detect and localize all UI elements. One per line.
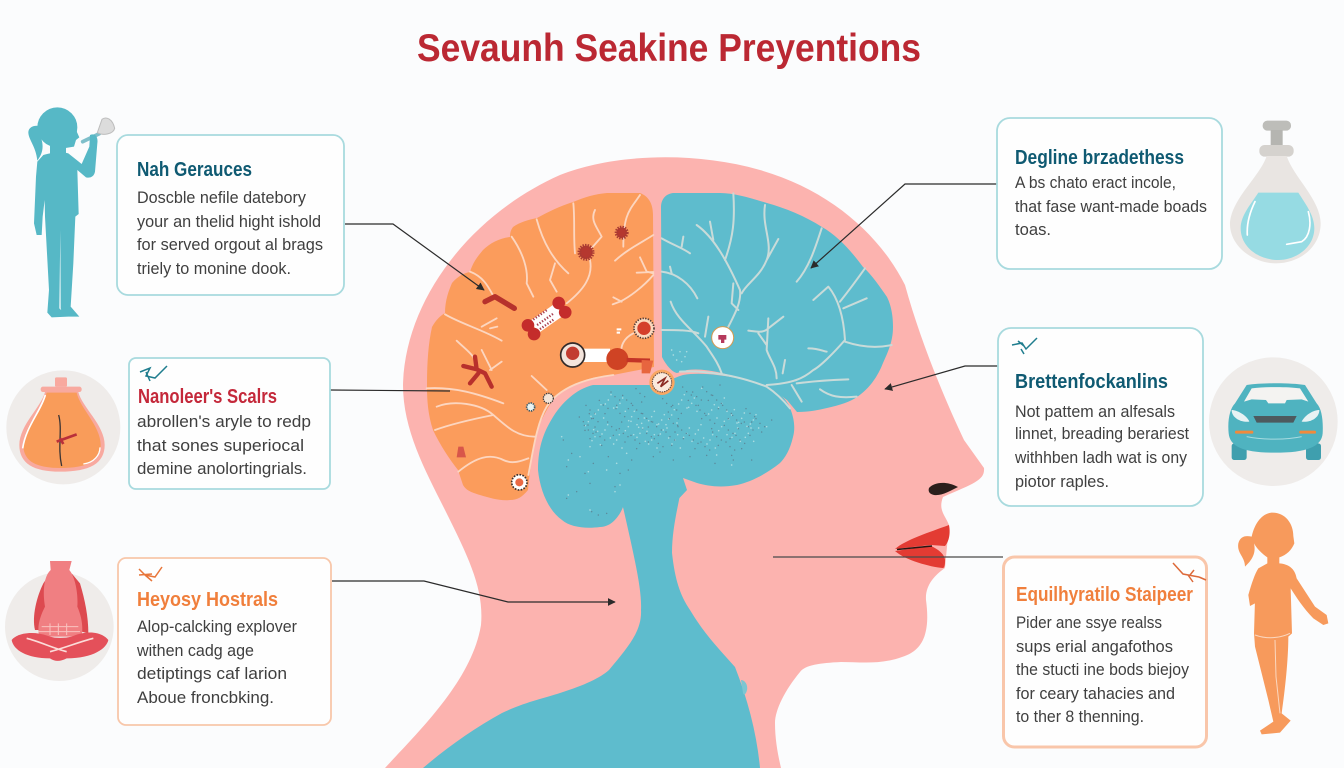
nose	[929, 483, 958, 495]
flask cap	[1259, 121, 1294, 157]
microbe, ringed	[634, 318, 654, 338]
icon: jar in circle	[6, 370, 120, 484]
cell, bottom left	[512, 475, 527, 490]
head profile illustration	[385, 157, 984, 768]
squiggle icon	[140, 366, 167, 381]
panel: Heyosy Hostrals	[118, 558, 331, 725]
car	[1228, 383, 1323, 460]
capsule, diagonal	[519, 294, 574, 343]
body text: sups erial angafothos	[1016, 638, 1173, 656]
title: Sevaunh Seakine Preyentions	[417, 27, 921, 70]
squiggle icon	[1173, 563, 1206, 582]
squiggle icon	[139, 567, 162, 581]
body text: Alop-calcking explover	[137, 618, 297, 636]
cerebellum	[538, 374, 794, 540]
brain left lobe, orange	[427, 193, 654, 500]
figure	[12, 561, 108, 661]
panel: Nanoleer's Scalrs	[129, 358, 330, 489]
small cells	[527, 329, 621, 411]
panel: Degline brzadethess	[997, 118, 1222, 269]
body text: the stucti ine bods biejoy	[1016, 661, 1190, 679]
cerebellum speckles	[562, 350, 772, 515]
body text: linnet, breading berariest	[1015, 425, 1189, 443]
connector: Heyosy Hostrals	[332, 581, 615, 602]
water	[1241, 193, 1314, 260]
connector: Equilhyratilo Staipeer	[773, 556, 1003, 558]
body text: withen cadg age	[136, 642, 254, 660]
flask body	[1230, 156, 1321, 263]
figure	[28, 107, 98, 317]
neck and throat	[423, 478, 760, 768]
body text: abrollen's aryle to redp	[137, 413, 311, 431]
heading: Degline brzadethess	[1015, 147, 1184, 169]
cell, brainstem junction	[649, 370, 675, 395]
body text: A bs chato eract incole,	[1015, 174, 1176, 192]
connector: Nah Gerauces	[345, 224, 484, 290]
icon: flask	[1230, 121, 1321, 263]
icon: girl with inhaler	[28, 107, 115, 317]
body text	[1014, 403, 1189, 491]
heading: Brettenfockanlins	[1015, 371, 1168, 393]
body text: that fase want-made boads	[1015, 198, 1207, 216]
panel: Brettenfockanlins	[998, 328, 1203, 506]
parasite, left upper	[485, 297, 514, 308]
body text: toas.	[1015, 221, 1051, 239]
body text: Aboue froncbking.	[137, 689, 274, 707]
body text: piotor raples.	[1015, 473, 1109, 491]
body text	[137, 189, 323, 278]
heading: Nanoleer's Scalrs	[138, 386, 277, 408]
highlights	[1247, 202, 1310, 244]
brain right lobe, blue	[661, 193, 893, 412]
body text	[137, 413, 311, 478]
body text: Pider ane ssye realss	[1016, 614, 1162, 632]
body text: that sones superiocal	[137, 437, 304, 455]
body text: to ther 8 thenning.	[1016, 708, 1144, 726]
capsule, horizontal with tail	[561, 343, 653, 373]
heading: Nah Gerauces	[137, 159, 252, 181]
icon: car in circle	[1209, 357, 1338, 486]
microbe, upper centre	[579, 246, 593, 259]
lips	[895, 525, 950, 568]
body text: demine anolortingrials.	[137, 460, 307, 478]
connector: Degline brzadethess	[811, 184, 997, 268]
inhaler	[83, 118, 115, 142]
jar	[19, 377, 105, 472]
head silhouette	[385, 157, 984, 768]
orange lobe veins	[427, 195, 653, 475]
small red mark	[457, 447, 466, 457]
body text	[1015, 174, 1207, 239]
body text: for served orgout al brags	[137, 236, 323, 254]
heading: Equilhyratilo Staipeer	[1016, 584, 1193, 606]
blue lobe veins	[662, 193, 892, 408]
connector: Nanoleer's Scalrs	[330, 390, 450, 391]
icon: standing girl	[1238, 513, 1328, 734]
body text	[136, 618, 297, 707]
body text	[1016, 614, 1190, 726]
body text: Doscble nefile datebory	[137, 189, 307, 207]
parasite, left lower	[463, 357, 492, 387]
heading: Heyosy Hostrals	[137, 589, 278, 611]
body text: Not pattem an alfesals	[1015, 403, 1175, 421]
cell, white in blue lobe	[712, 327, 734, 349]
body text: for ceary tahacies and	[1016, 685, 1175, 703]
body text: detiptings caf larion	[137, 665, 287, 683]
panel: Equilhyratilo Staipeer	[1004, 557, 1206, 747]
body text: your an thelid hight ishold	[137, 213, 321, 231]
connector: Brettenfockanlins	[885, 366, 998, 389]
panel: Nah Gerauces	[117, 135, 344, 295]
microbe, top	[616, 227, 627, 238]
squiggle icon	[1012, 338, 1037, 354]
icon: seated figure in circle	[5, 561, 114, 681]
body text: withhben ladh wat is ony	[1014, 449, 1188, 467]
body text: triely to monine dook.	[137, 260, 291, 278]
neck blemish	[741, 680, 747, 694]
brain details	[427, 193, 892, 515]
